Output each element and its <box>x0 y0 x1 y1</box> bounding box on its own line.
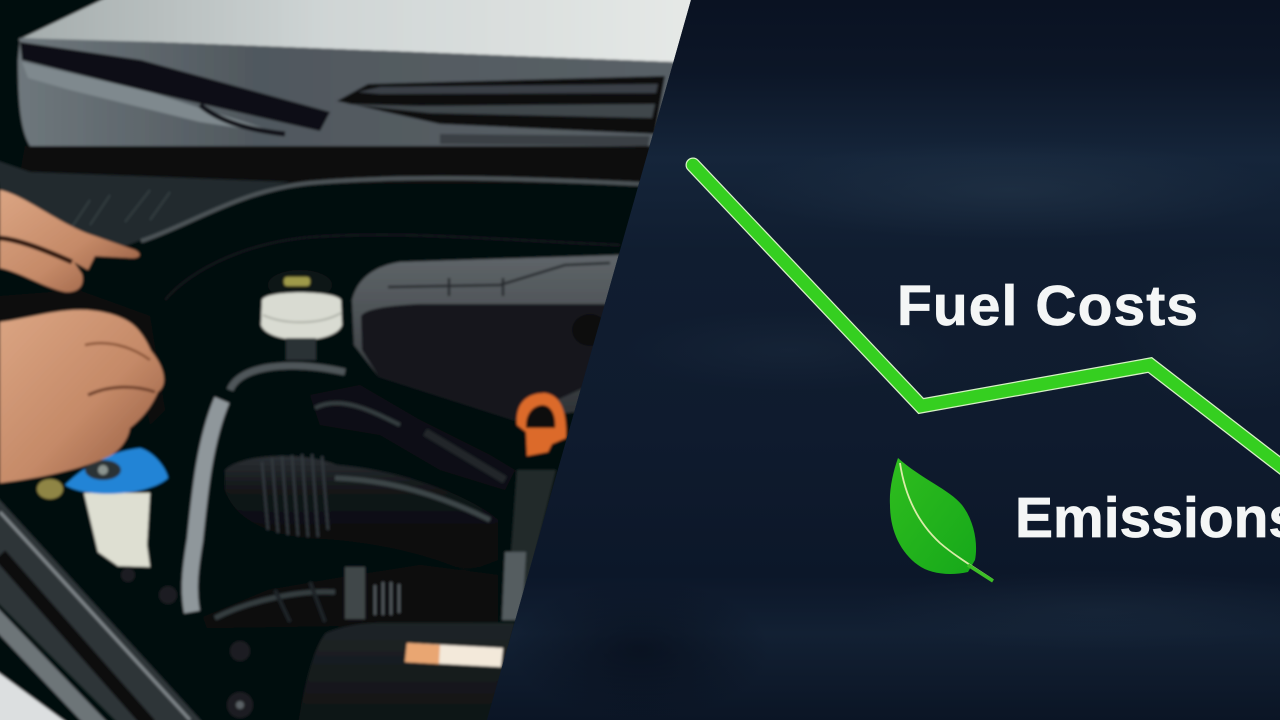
intake hose <box>225 454 498 572</box>
wiper blade <box>20 42 330 134</box>
right bracket <box>502 470 556 620</box>
silver hose <box>190 400 222 612</box>
hood cowl panel <box>18 38 700 147</box>
brass bolt <box>37 479 63 499</box>
blue washer cap and bottle <box>65 448 168 567</box>
panel: dark navy background <box>487 0 1280 720</box>
heading: Fuel Costs: Fuel Costs <box>897 274 1198 338</box>
chart: falling green line <box>693 165 1280 477</box>
lower black cover with label <box>298 623 515 720</box>
upper hand <box>0 190 140 292</box>
left inner panel with streaks <box>0 160 290 252</box>
orange dipstick handle <box>517 393 566 456</box>
engine cover <box>352 255 620 420</box>
dark body band <box>20 146 660 184</box>
left fender <box>0 495 205 720</box>
engine wiring block <box>310 385 515 490</box>
wiper highlight <box>22 62 262 130</box>
cowl vent <box>337 76 665 146</box>
windshield <box>18 0 700 63</box>
seal edge <box>141 178 640 241</box>
lower intake <box>203 565 498 628</box>
photo: engine bay with hands <box>0 0 705 720</box>
coolant reservoir <box>261 270 342 360</box>
bolts <box>121 568 253 718</box>
small tube <box>230 366 345 390</box>
icon: green leaf <box>890 458 993 581</box>
clip held in hands <box>0 290 165 425</box>
lower hand <box>0 310 164 483</box>
